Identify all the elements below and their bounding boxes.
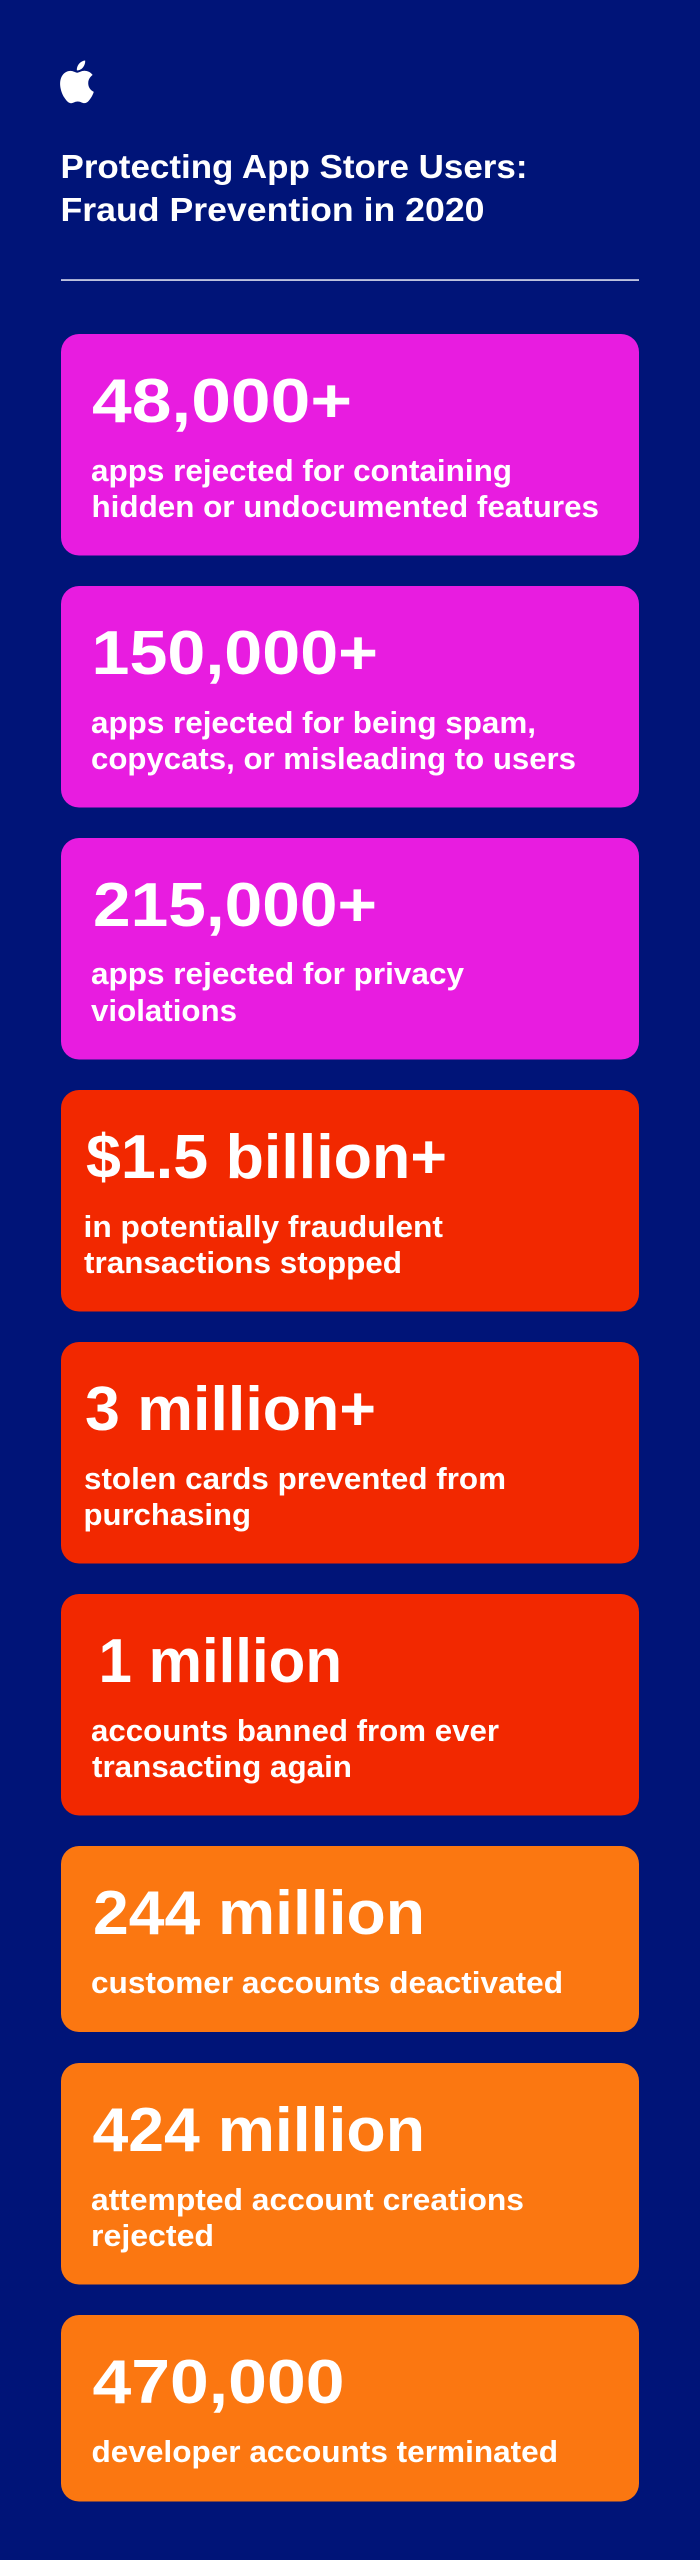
- description: apps rejected for privacy: [91, 956, 465, 991]
- number: 1 million: [98, 1627, 342, 1696]
- panel: 1 million accounts banned: [61, 1594, 639, 1816]
- number: $1.5 billion+: [86, 1123, 447, 1192]
- number: 244 million: [93, 1879, 425, 1948]
- description: [84, 1209, 443, 1280]
- description: accounts banned from ever: [91, 1713, 499, 1748]
- number: 150,000+: [92, 619, 378, 688]
- panel: 48,000+ apps rejected: [61, 334, 639, 556]
- description: [91, 705, 576, 776]
- description: customer accounts deactivated: [91, 1965, 563, 2000]
- number: 215,000+: [93, 871, 377, 940]
- panel: 244 million accounts deactivated: [61, 1846, 639, 2032]
- description: purchasing: [84, 1497, 251, 1532]
- title: Protecting App Store Users:: [60, 148, 528, 185]
- title: [60, 148, 528, 228]
- description: apps rejected for being spam,: [91, 705, 536, 740]
- description: in potentially fraudulent: [84, 1209, 443, 1244]
- description: [91, 2182, 524, 2253]
- panel: 424 million account creations rejected: [61, 2063, 639, 2284]
- number: 470,000: [92, 2348, 344, 2417]
- description: violations: [91, 993, 237, 1028]
- panel: 215,000+ apps rejected: [61, 838, 639, 1060]
- panel: 3 million+ stolen cards: [61, 1342, 639, 1564]
- description: stolen cards prevented from: [84, 1461, 506, 1496]
- description: transacting again: [92, 1749, 352, 1784]
- description: attempted account creations: [91, 2182, 524, 2217]
- icon: apple logo: [60, 60, 94, 103]
- title: Fraud Prevention in 2020: [60, 191, 484, 228]
- description: hidden or undocumented features: [92, 489, 599, 524]
- panel: $1.5 billion+ transactions stopped: [61, 1090, 639, 1312]
- description: [91, 453, 599, 524]
- description: copycats, or misleading to users: [91, 741, 576, 776]
- description: developer accounts terminated: [92, 2434, 558, 2469]
- description: apps rejected for containing: [91, 453, 512, 488]
- number: 3 million+: [85, 1375, 376, 1444]
- panel: 150,000+ apps rejected: [61, 586, 639, 808]
- number: 424 million: [92, 2096, 425, 2165]
- description: rejected: [91, 2218, 214, 2253]
- panel: 470,000 developer accounts terminated: [61, 2315, 639, 2502]
- description: [84, 1461, 506, 1532]
- description: [91, 956, 465, 1028]
- description: [91, 1713, 499, 1784]
- number: 48,000+: [92, 367, 352, 436]
- description: transactions stopped: [84, 1245, 402, 1280]
